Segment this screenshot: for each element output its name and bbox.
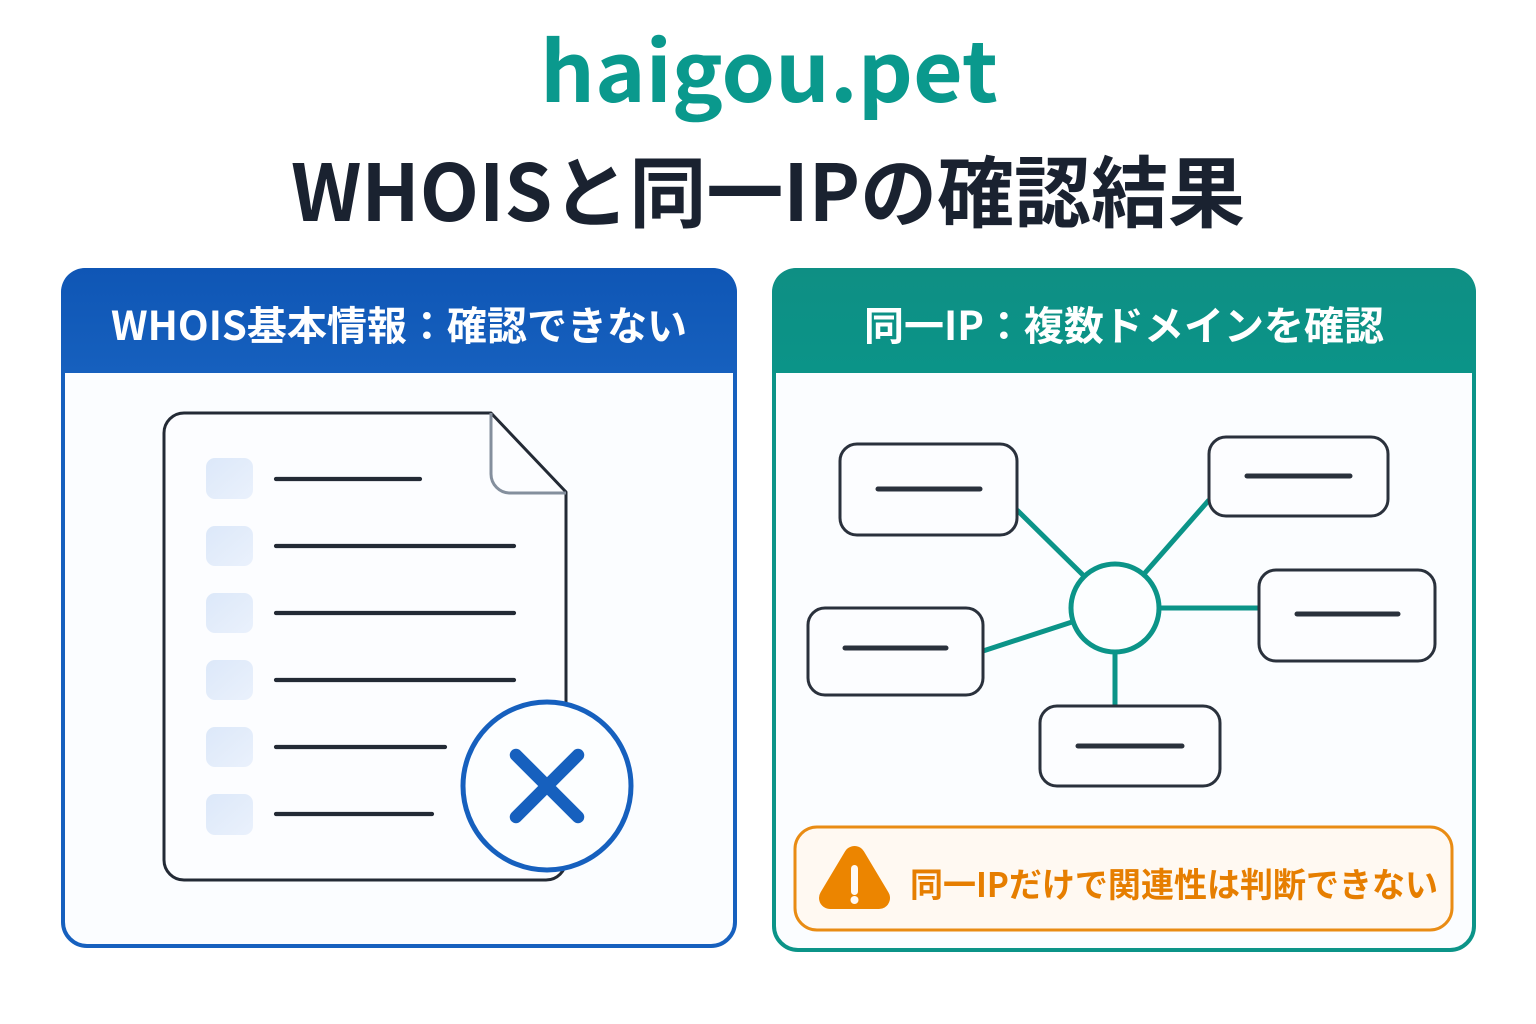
panel: WHOIS basic information	[61, 268, 737, 946]
panel body: same IP	[774, 270, 1474, 950]
domain box: top right	[1209, 437, 1388, 516]
site name: haigou.pet	[540, 6, 998, 126]
icon: document	[164, 413, 566, 880]
panel: same IP	[772, 268, 1476, 950]
callout: warning	[795, 827, 1452, 930]
main title: WHOISと同一IPの確認結果	[291, 132, 1245, 244]
document row 4	[206, 660, 514, 700]
document folded corner	[491, 413, 566, 493]
domain box: left	[808, 608, 983, 695]
panel header: WHOIS	[61, 268, 737, 373]
central IP node	[1071, 564, 1159, 652]
icon: warning triangle	[830, 857, 879, 904]
document row 6	[206, 794, 432, 835]
callout box	[795, 827, 1452, 930]
document row 2	[206, 526, 514, 566]
network diagram	[808, 437, 1435, 786]
document row 5	[206, 727, 445, 767]
panel body: WHOIS	[63, 270, 735, 946]
document row 3	[206, 593, 514, 633]
domain box: top left	[840, 444, 1017, 535]
document row 1	[206, 458, 420, 499]
document sheet	[164, 413, 566, 880]
callout text: 同一IPだけで関連性は判断できない	[910, 858, 1438, 907]
connector lines	[983, 500, 1259, 706]
domain box: right	[1259, 570, 1435, 661]
panel header: same IP	[772, 268, 1476, 373]
panel heading: WHOIS: WHOIS基本情報：確認できない	[111, 294, 687, 352]
icon: cross in circle	[463, 702, 631, 870]
panel heading: same IP: 同一IP：複数ドメインを確認	[864, 294, 1384, 352]
domain box: bottom	[1040, 706, 1220, 786]
